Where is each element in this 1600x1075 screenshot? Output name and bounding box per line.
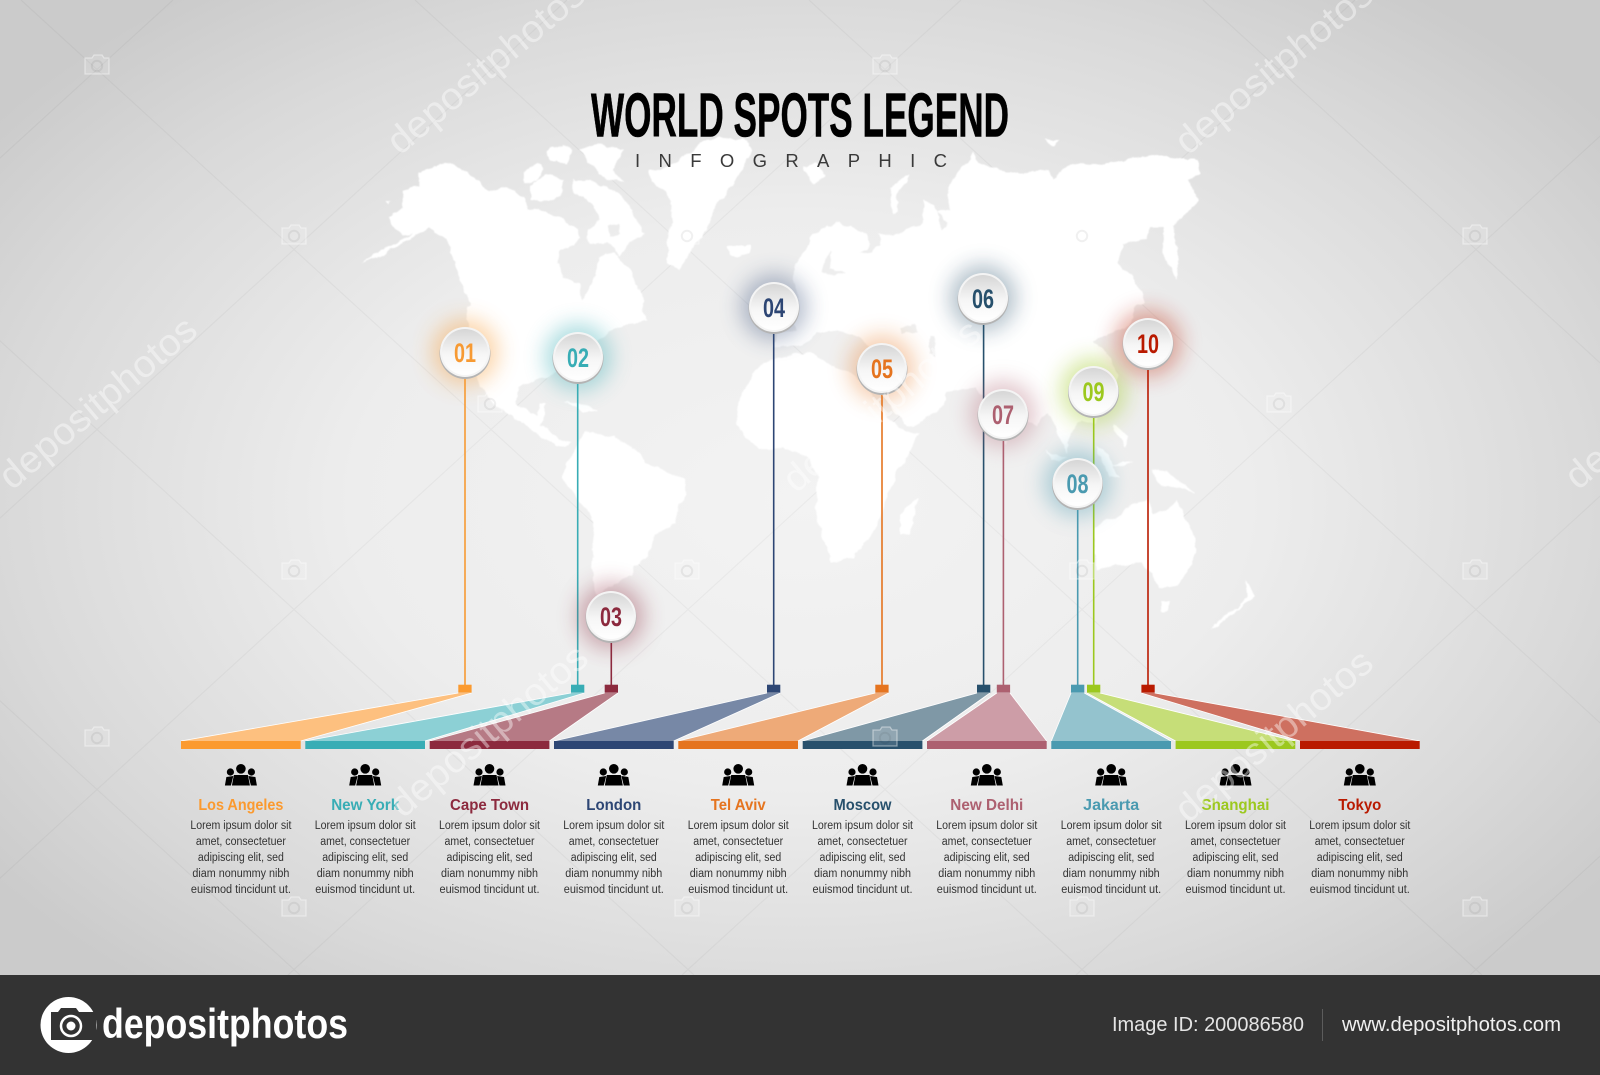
legend column: Shanghai: adipiscing elit, sed (1192, 852, 1278, 864)
legend column: Shanghai: amet, consectetuer (1190, 836, 1281, 848)
pin 10 (1115, 310, 1181, 376)
pin 07 (970, 381, 1036, 447)
legend column: Los Angeles: adipiscing elit, sed (198, 852, 284, 864)
connector 02 (305, 685, 584, 749)
website: www.depositphotos.com (1341, 1014, 1561, 1036)
image id: Image ID: 200086580 (1112, 1014, 1304, 1036)
pin 10: 10 (1137, 329, 1159, 359)
connector 08 (1051, 685, 1171, 749)
legend column: Jakarta: amet, consectetuer (1066, 836, 1156, 848)
legend column: London: Lorem ipsum dolor sit (563, 820, 665, 832)
legend column: Tel Aviv: amet, consectetuer (693, 836, 783, 848)
legend column: New Delhi: amet, consectetuer (942, 836, 1032, 848)
legend column: New Delhi: adipiscing elit, sed (944, 852, 1030, 864)
pin 01 (432, 319, 498, 385)
subtitle: INFOGRAPHIC (635, 150, 947, 171)
legend column: Shanghai: diam nonummy nibh (1187, 868, 1284, 880)
legend column: Moscow: Lorem ipsum dolor sit (812, 820, 914, 832)
pin 09: 09 (1082, 377, 1104, 407)
connector 04 (554, 685, 780, 749)
legend column: New York: adipiscing elit, sed (322, 852, 408, 864)
legend column: Moscow: euismod tincidunt ut. (812, 884, 912, 896)
legend column: Los Angeles: Los Angeles (198, 797, 283, 814)
legend column: New Delhi: euismod tincidunt ut. (937, 884, 1037, 896)
pin 05 (849, 335, 915, 401)
legend column: New York: euismod tincidunt ut. (315, 884, 415, 896)
map: southeast asia and oceania (1045, 423, 1255, 630)
legend column: New Delhi: Lorem ipsum dolor sit (936, 820, 1038, 832)
legend column: Moscow: Moscow (834, 797, 892, 814)
footer logo (40, 997, 348, 1053)
legend column: New York: Lorem ipsum dolor sit (315, 820, 416, 832)
legend column: Cape Town: diam nonummy nibh (441, 868, 538, 880)
legend column: Tel Aviv: Tel Aviv (711, 797, 766, 814)
map: greenland and iceland (650, 137, 752, 270)
legend column: Moscow: adipiscing elit, sed (820, 852, 906, 864)
legend column: New York: amet, consectetuer (320, 836, 410, 848)
legend column: Los Angeles: amet, consectetuer (196, 836, 286, 848)
legend column: Tokyo: adipiscing elit, sed (1317, 852, 1403, 864)
watermark text: depositphotos (775, 311, 989, 501)
pin 01: 01 (454, 338, 476, 368)
legend column: Cape Town: Cape Town (450, 797, 529, 814)
pin 02: 02 (567, 343, 589, 373)
pin 04 (741, 274, 807, 340)
connector 03 (430, 685, 618, 749)
legend column: Cape Town: adipiscing elit, sed (446, 852, 532, 864)
legend column: New Delhi: New Delhi (950, 797, 1023, 814)
legend column: Shanghai: euismod tincidunt ut. (1186, 884, 1286, 896)
legend column: Shanghai: Shanghai (1202, 797, 1270, 814)
legend column: New York: New York (331, 797, 400, 814)
legend column: Los Angeles: euismod tincidunt ut. (191, 884, 291, 896)
legend column: Cape Town: Lorem ipsum dolor sit (439, 820, 541, 832)
legend column: Tokyo: diam nonummy nibh (1311, 868, 1408, 880)
legend column: Moscow (812, 764, 914, 896)
legend column: London: euismod tincidunt ut. (564, 884, 664, 896)
pin 04: 04 (763, 293, 785, 323)
legend column: Jakarta: Jakarta (1083, 797, 1140, 814)
legend column: Moscow: amet, consectetuer (818, 836, 908, 848)
legend column: New York (315, 764, 416, 896)
legend column: Shanghai: Lorem ipsum dolor sit (1185, 820, 1287, 832)
connector 07 (927, 685, 1047, 749)
legend column: New York: diam nonummy nibh (317, 868, 414, 880)
legend column: Jakarta: adipiscing elit, sed (1068, 852, 1154, 864)
pin 08: 08 (1066, 469, 1088, 499)
legend column: London: amet, consectetuer (569, 836, 659, 848)
pin 06: 06 (972, 284, 994, 314)
map: north america (360, 143, 647, 448)
map: eurasia (773, 140, 1201, 453)
pin stems (465, 315, 1148, 686)
connector 10 (1141, 685, 1420, 749)
world map (360, 137, 1255, 630)
legend column: Tel Aviv: adipiscing elit, sed (695, 852, 781, 864)
pin 07: 07 (992, 400, 1014, 430)
legend column: Tel Aviv (688, 764, 789, 896)
pin 02 (545, 324, 611, 390)
legend column: Jakarta: diam nonummy nibh (1063, 868, 1160, 880)
legend column: New Delhi: diam nonummy nibh (938, 868, 1035, 880)
legend column: Cape Town: amet, consectetuer (444, 836, 535, 848)
pin 06 (950, 265, 1016, 331)
watermark text: depositphotos (382, 636, 596, 826)
pin 09 (1060, 358, 1126, 424)
legend column: Tel Aviv: diam nonummy nibh (690, 868, 787, 880)
pin 05: 05 (871, 354, 893, 384)
legend column: Tokyo: euismod tincidunt ut. (1310, 884, 1410, 896)
legend column: London: London (586, 797, 641, 814)
connector 01 (181, 685, 472, 749)
legend column: Moscow: diam nonummy nibh (814, 868, 911, 880)
legend column: Tokyo: Lorem ipsum dolor sit (1309, 820, 1411, 832)
legend column: Tokyo: amet, consectetuer (1315, 836, 1405, 848)
watermark text (0, 0, 1600, 831)
legend column: London: adipiscing elit, sed (571, 852, 657, 864)
legend column: Los Angeles (190, 764, 292, 896)
map: south america and africa (562, 352, 920, 597)
legend column: Shanghai (1185, 764, 1287, 896)
legend column: Cape Town (439, 764, 541, 896)
legend column: New Delhi (936, 764, 1038, 896)
legend column: Tokyo (1309, 764, 1411, 896)
watermark camera icons (85, 55, 1487, 916)
pin 03: 03 (600, 602, 622, 632)
legend column: Los Angeles: Lorem ipsum dolor sit (190, 820, 292, 832)
legend column: Jakarta: Lorem ipsum dolor sit (1061, 820, 1162, 832)
connector 09 (1087, 685, 1295, 749)
watermark text: depositphotos (1167, 641, 1381, 831)
legend column: London (563, 764, 665, 896)
footer logo: depositphotos (102, 1000, 348, 1047)
connector 06 (803, 685, 990, 749)
pin 03 (578, 583, 644, 649)
legend column: Cape Town: euismod tincidunt ut. (440, 884, 540, 896)
title: WORLD SPOTS LEGEND (591, 82, 1009, 150)
pins (432, 265, 1181, 649)
legend column: Tel Aviv: euismod tincidunt ut. (688, 884, 788, 896)
pin 08 (1044, 450, 1110, 516)
legend column: Jakarta (1061, 764, 1162, 896)
footer band (0, 975, 1600, 1075)
legend column: London: diam nonummy nibh (565, 868, 662, 880)
legend column: Tokyo: Tokyo (1338, 797, 1381, 814)
legend column: Los Angeles: diam nonummy nibh (192, 868, 289, 880)
legend connector bars (181, 685, 1420, 749)
connector 05 (678, 685, 889, 749)
legend column: Jakarta: euismod tincidunt ut. (1061, 884, 1161, 896)
legend column: Tel Aviv: Lorem ipsum dolor sit (688, 820, 789, 832)
